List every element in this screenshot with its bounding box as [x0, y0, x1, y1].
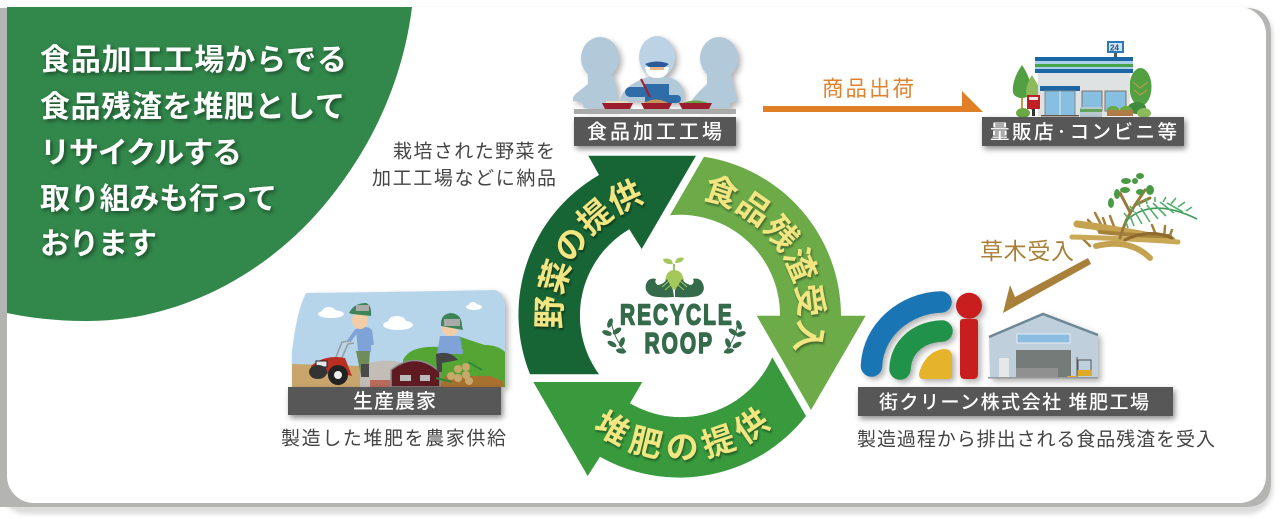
icon: left trees: [1013, 65, 1038, 113]
heading: headline text: 取り組みも行って: [40, 174, 277, 218]
arrow: grass and wood intake: [1003, 258, 1091, 313]
icon: clouds: [318, 302, 482, 330]
arrow: food waste intake: [670, 156, 866, 410]
icon: centre worker: [620, 36, 684, 103]
icon: crouching farmer: [436, 313, 463, 372]
icon: counter and trays: [574, 100, 736, 114]
icon: tiller machine: [309, 341, 354, 385]
arrow: vegetable supply: [518, 156, 696, 374]
icon: hands: [646, 279, 704, 297]
arrow: food waste intake: 食品残渣受入: [704, 176, 830, 354]
text: recycle roop wordmark: RECYCLE: [620, 299, 734, 331]
chart: recycle loop: [518, 156, 866, 478]
icon: left worker silhouette: [573, 37, 619, 108]
illustration: food factory workers: [573, 36, 738, 114]
text: recycle roop wordmark: ROOP: [644, 328, 714, 360]
illustration: grass and brush: [1072, 173, 1197, 258]
text: grass and wood intake: 草木受入: [980, 232, 1074, 266]
text: vegetable delivery caption: 栽培された野菜を: [393, 136, 555, 164]
logo: recycle roop: [601, 258, 747, 360]
icon: bushes and planter: [1016, 102, 1151, 118]
icon: mailbox: [1027, 95, 1040, 116]
arrow: product shipping: [763, 91, 983, 112]
icon: store building: [1035, 57, 1133, 116]
arrow: compost supply: [533, 357, 806, 478]
icon: 24 hour sign: 24: [1110, 44, 1119, 52]
icon: right laurel: [724, 319, 747, 354]
text: food waste intake caption: 製造過程から排出される食品残渣を受入: [857, 424, 1215, 452]
icon: brush pile: [1072, 190, 1178, 258]
text: compost supply caption: 製造した堆肥を農家供給: [281, 424, 506, 450]
icon: sprout: [663, 258, 684, 290]
text: product shipping: 商品出荷: [822, 72, 914, 103]
icon: palm frond: [1124, 197, 1197, 228]
label: farmers: 生産農家: [353, 385, 436, 414]
heading: headline text: おります: [40, 219, 157, 263]
logo: machi clean: [872, 293, 982, 379]
text: vegetable delivery caption: [372, 136, 556, 190]
panel: green headline quadrant: [7, 7, 412, 321]
heading: headline text: 食品加工工場からでる: [40, 35, 347, 79]
illustration: farmers scene: [292, 290, 505, 387]
icon: right worker silhouette: [692, 37, 738, 108]
icon: leaves: [1108, 173, 1154, 208]
icon: standing farmer: [349, 303, 372, 377]
icon: greenhouse and barn: [360, 360, 440, 387]
text: vegetable delivery caption: 加工工場などに納品: [372, 164, 556, 190]
heading: headline text: 食品残渣を堆肥として: [40, 82, 345, 126]
label: retail stores: 量販店·コンビニ等: [990, 116, 1177, 144]
label: farmers: [288, 385, 501, 415]
heading: headline text: [40, 35, 347, 263]
illustration: convenience store: [1013, 41, 1152, 118]
label: food factory: 食品加工工場: [587, 116, 722, 144]
illustration: compost factory: [988, 313, 1098, 378]
arrow: vegetable supply: 野菜の提供: [534, 178, 646, 331]
icon: sky and field: [292, 290, 505, 387]
icon: harvested potatoes: [436, 362, 482, 385]
label: compost factory: 街クリーン株式会社 堆肥工場: [879, 388, 1149, 414]
text: recycle roop wordmark: [620, 299, 734, 360]
arrow: compost supply: 堆肥の提供: [594, 406, 773, 464]
icon: right tree: [1130, 68, 1152, 111]
heading: headline text: リサイクルする: [40, 128, 242, 172]
icon: left laurel: [601, 317, 626, 354]
